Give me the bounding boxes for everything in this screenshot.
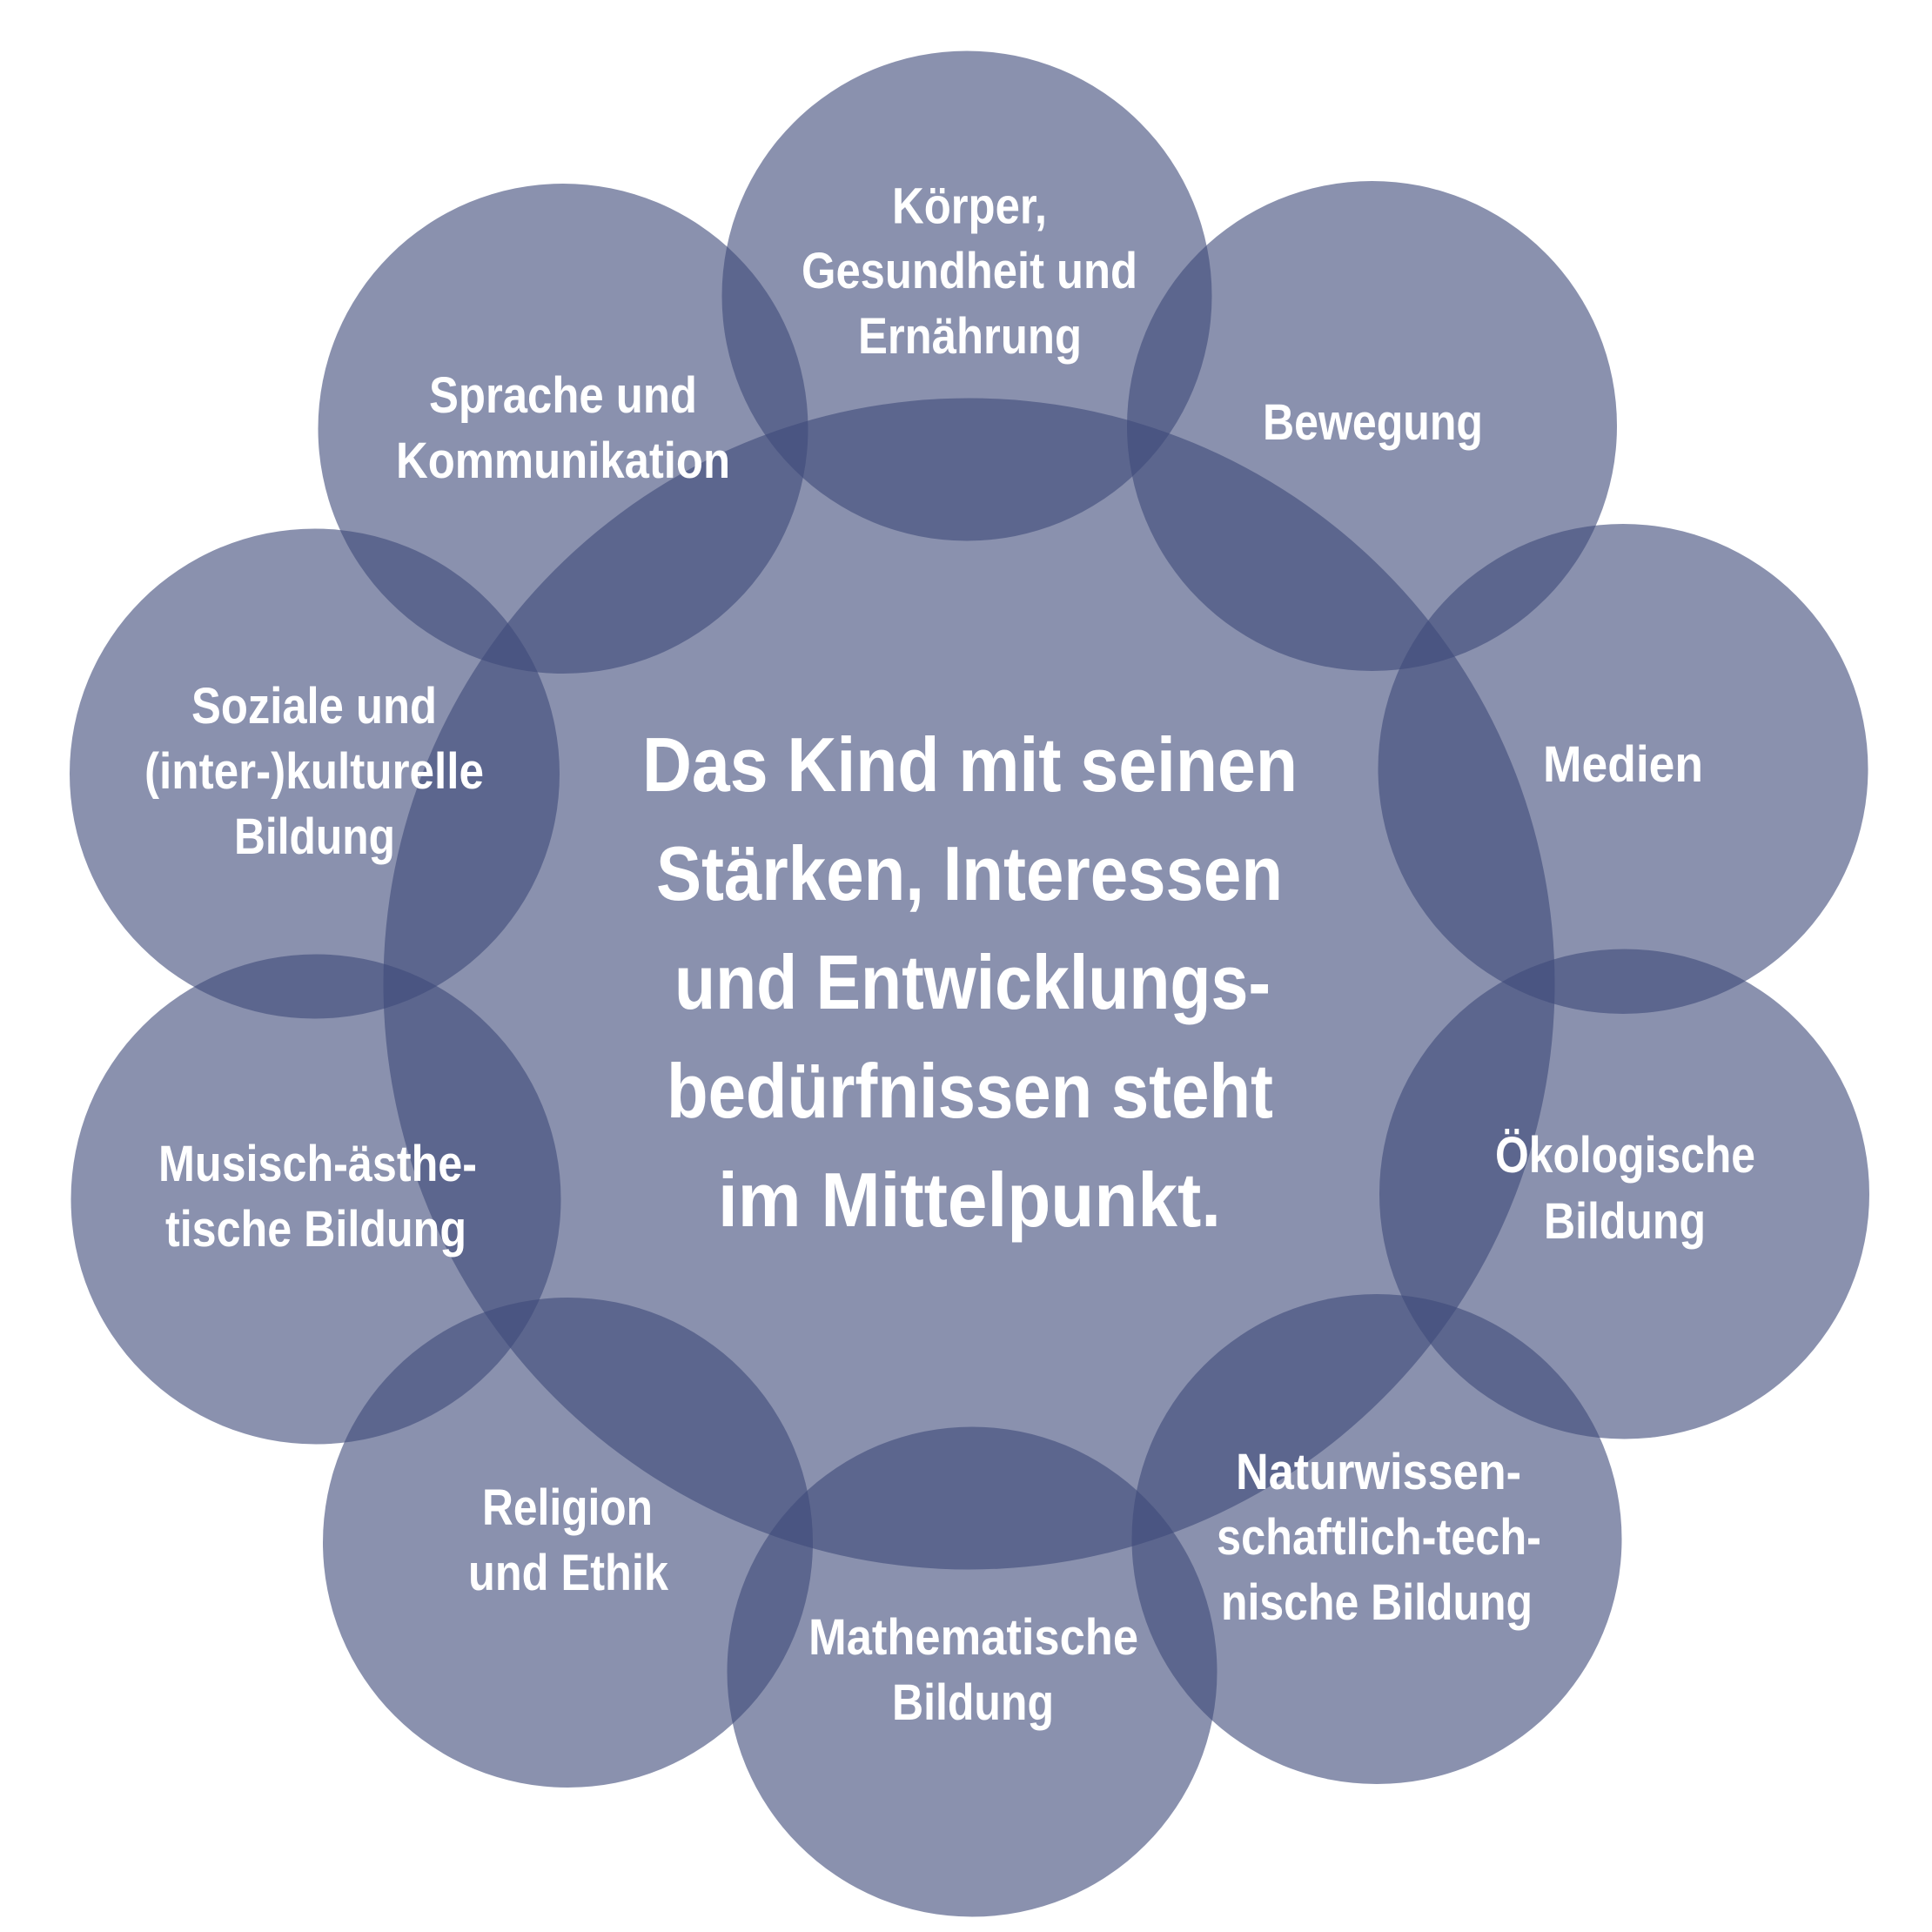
label: Religion und Ethik: und Ethik xyxy=(468,1545,669,1601)
label: Sprache und Kommunikation xyxy=(396,367,730,489)
label: Naturwissenschaftlich-technische Bildung: schaftlich-tech- xyxy=(1217,1509,1541,1566)
label: Religion und Ethik xyxy=(468,1479,669,1601)
label: Ökologische Bildung: Ökologische xyxy=(1495,1127,1755,1184)
circle: Mathematische Bildung xyxy=(728,1427,1217,1916)
label: Ökologische Bildung: Bildung xyxy=(1544,1193,1706,1250)
label: Musisch-ästhetische Bildung: tische Bildung xyxy=(165,1201,466,1258)
label: Soziale und (inter-)kulturelle Bildung: Bildung xyxy=(234,808,395,865)
label: Musisch-ästhetische Bildung xyxy=(158,1136,477,1258)
label: Sprache und Kommunikation: Sprache und xyxy=(429,367,697,424)
label: Mathematische Bildung: Mathematische xyxy=(808,1609,1138,1666)
label: Körper, Gesundheit und Ernährung xyxy=(802,178,1137,365)
central text: Stärken, Interessen xyxy=(656,830,1283,916)
central text: bedürfnissen steht xyxy=(667,1048,1273,1134)
label: Naturwissenschaftlich-technische Bildung xyxy=(1217,1444,1541,1631)
label: Mathematische Bildung xyxy=(808,1609,1138,1731)
circle: Musisch-ästhetische Bildung xyxy=(71,954,560,1445)
circle: Ökologische Bildung xyxy=(1379,949,1869,1439)
central circle xyxy=(383,399,1554,1570)
label: Soziale und (inter-)kulturelle Bildung xyxy=(144,678,484,865)
central text: im Mittelpunkt. xyxy=(718,1157,1221,1243)
label: Naturwissenschaftlich-technische Bildung: nische Bildung xyxy=(1221,1574,1533,1631)
central text xyxy=(642,721,1298,1243)
label: Ökologische Bildung xyxy=(1495,1127,1755,1250)
circle: Soziale und (inter-)kulturelle Bildung xyxy=(70,529,560,1018)
circle: Naturwissenschaftlich-technische Bildung xyxy=(1131,1294,1622,1784)
label: Mathematische Bildung: Bildung xyxy=(892,1674,1054,1731)
label: Körper, Gesundheit und Ernährung: Körper, xyxy=(892,178,1047,235)
label: Soziale und (inter-)kulturelle Bildung: (inter-)kulturelle xyxy=(144,743,484,800)
circle: Bewegung xyxy=(1127,181,1617,671)
circle: Medien xyxy=(1379,524,1868,1014)
label: Musisch-ästhetische Bildung: Musisch-ästhe- xyxy=(158,1136,477,1192)
label: Bewegung: Bewegung xyxy=(1263,394,1483,451)
label: Sprache und Kommunikation: Kommunikation xyxy=(396,433,730,489)
label: Körper, Gesundheit und Ernährung: Ernährung xyxy=(858,308,1082,365)
label: Soziale und (inter-)kulturelle Bildung: Soziale und xyxy=(191,678,437,735)
label: Religion und Ethik: Religion xyxy=(482,1479,653,1536)
central text: Das Kind mit seinen xyxy=(642,721,1298,808)
label: Körper, Gesundheit und Ernährung: Gesundheit und xyxy=(802,243,1137,299)
circle: Sprache und Kommunikation xyxy=(319,184,808,674)
circle: Religion und Ethik xyxy=(323,1298,813,1788)
circle: Körper, Gesundheit und Ernährung xyxy=(722,50,1211,541)
label: Medien: Medien xyxy=(1543,736,1703,793)
label: Naturwissenschaftlich-technische Bildung: Naturwissen- xyxy=(1236,1444,1521,1500)
central text: und Entwicklungs- xyxy=(674,939,1271,1025)
